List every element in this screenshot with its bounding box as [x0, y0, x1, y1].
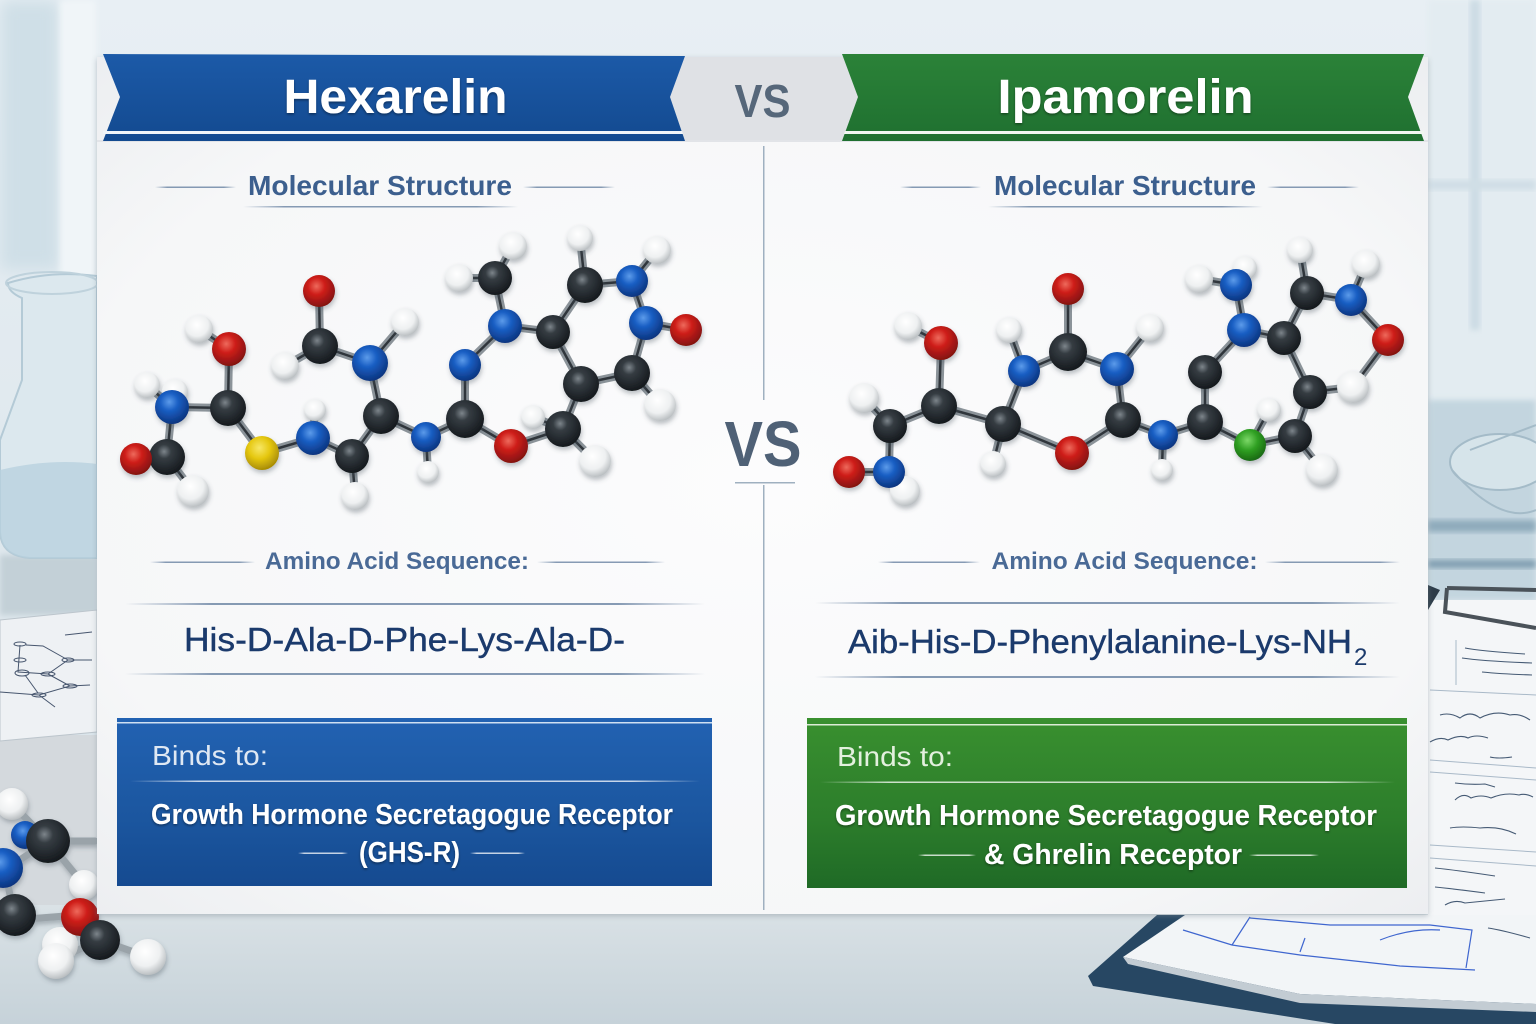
panel: Hexarelin binds to: Binds to:	[152, 740, 268, 771]
banner: Ipamorelin	[842, 54, 1424, 141]
icon: petri dish	[1450, 425, 1536, 513]
banner: Ipamorelin: Ipamorelin	[998, 71, 1254, 124]
heading: Hexarelin molecular structure: Molecular Structure	[248, 170, 512, 201]
atoms	[833, 237, 1404, 506]
text: Ipamorelin sequence: Aib-His-D-Phenylalanine-Lys-NH	[848, 623, 1352, 660]
center divider with VS: VS	[724, 408, 802, 480]
banner: Hexarelin: Hexarelin	[284, 71, 508, 124]
panel: Hexarelin binds to: (GHS-R)	[359, 837, 460, 869]
molecule: Ipamorelin	[833, 237, 1404, 506]
panel: Ipamorelin binds to: Binds to:	[837, 741, 953, 772]
molecule: Hexarelin	[120, 225, 702, 510]
decorative molecule bottom left	[0, 788, 166, 979]
heading: Ipamorelin amino acid sequence: Amino Acid Sequence:	[992, 548, 1258, 575]
text: Ipamorelin sequence	[815, 602, 1400, 678]
panel: comparison card	[97, 57, 1428, 916]
heading: Hexarelin amino acid sequence: Amino Acid Sequence:	[265, 548, 529, 575]
panel: Hexarelin binds to	[117, 718, 712, 886]
panel: Ipamorelin binds to	[807, 718, 1407, 888]
atoms	[120, 225, 702, 510]
text: Hexarelin sequence: His-D-Ala-D-Phe-Lys-Ala-D-	[184, 621, 625, 658]
notebook and clipboard	[1088, 585, 1536, 1024]
banner: Hexarelin	[103, 54, 685, 141]
heading: Ipamorelin molecular structure: Molecular Structure	[994, 170, 1256, 201]
icon: glass flask	[0, 272, 98, 558]
panel: Ipamorelin binds to: Growth Hormone Secretagogue Receptor	[835, 800, 1377, 832]
header label: VS: VS	[734, 75, 790, 127]
bonds	[136, 238, 686, 496]
panel: Hexarelin binds to: Growth Hormone Secretagogue Receptor	[151, 799, 673, 831]
panel: Ipamorelin binds to: & Ghrelin Receptor	[984, 839, 1242, 871]
bonds	[849, 250, 1388, 491]
sketch paper with chemical drawing	[0, 610, 97, 741]
text: Ipamorelin sequence: 2	[1354, 644, 1367, 671]
